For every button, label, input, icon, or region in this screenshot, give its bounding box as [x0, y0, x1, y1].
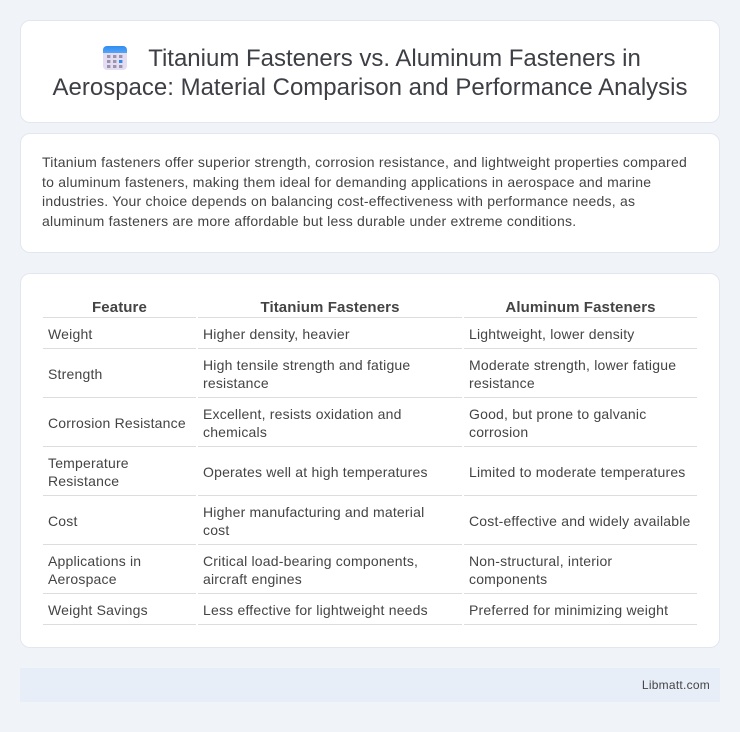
comparison table grid: Operates well at high temperatures	[203, 464, 428, 480]
title line 2: Aerospace: Material Comparison and Performance Analysis	[53, 74, 687, 101]
comparison table grid: Weight	[48, 326, 93, 342]
intro text: to aluminum fasteners, making them ideal for demanding applications in aerospace and marine	[42, 174, 651, 190]
intro text: Titanium fasteners offer superior strength, corrosion resistance, and lightweight properties compared	[42, 154, 687, 170]
comparison table grid: Less effective for lightweight needs	[203, 602, 428, 618]
comparison table grid: Non-structural, interior	[469, 553, 612, 569]
comparison table grid: Higher manufacturing and material	[203, 504, 424, 520]
comparison table grid: cost	[203, 522, 229, 538]
comparison table grid: Applications in	[48, 553, 141, 569]
comparison table grid: Temperature	[48, 455, 129, 471]
comparison table grid: Feature	[92, 299, 147, 316]
comparison table grid: resistance	[203, 375, 269, 391]
comparison table grid: Moderate strength, lower fatigue	[469, 357, 676, 373]
comparison table grid: Limited to moderate temperatures	[469, 464, 686, 480]
title line 1: Titanium Fasteners vs. Aluminum Fasteners in	[148, 45, 641, 72]
comparison table grid: Cost-effective and widely available	[469, 513, 691, 529]
comparison table grid: Titanium Fasteners	[260, 299, 400, 316]
comparison table grid: aircraft engines	[203, 571, 302, 587]
comparison table grid	[43, 299, 697, 625]
comparison table grid: Aluminum Fasteners	[505, 299, 656, 316]
comparison table grid: Lightweight, lower density	[469, 326, 635, 342]
comparison table grid: Good, but prone to galvanic	[469, 406, 646, 422]
footer text: Libmatt.com	[642, 678, 710, 692]
comparison table grid: Weight Savings	[48, 602, 148, 618]
intro text: industries. Your choice depends on balancing cost-effectiveness with performance needs, as	[42, 193, 635, 209]
comparison table grid: Critical load-bearing components,	[203, 553, 418, 569]
comparison table grid: Preferred for minimizing weight	[469, 602, 668, 618]
comparison table grid: Resistance	[48, 473, 119, 489]
intro text: aluminum fasteners are more affordable but less durable under extreme conditions.	[42, 213, 576, 229]
comparison table grid: Excellent, resists oxidation and	[203, 406, 402, 422]
intro text	[42, 154, 687, 229]
comparison table grid: Higher density, heavier	[203, 326, 350, 342]
comparison table grid: resistance	[469, 375, 535, 391]
comparison table grid: Aerospace	[48, 571, 117, 587]
comparison table grid: Strength	[48, 366, 103, 382]
comparison table grid: Cost	[48, 513, 78, 529]
panel: title header	[20, 20, 720, 123]
footer bar	[20, 668, 720, 702]
icon: calendar	[103, 46, 127, 70]
panel: introduction	[20, 133, 720, 253]
panel: comparison table	[20, 273, 720, 648]
comparison table grid: Corrosion Resistance	[48, 415, 186, 431]
comparison table grid: components	[469, 571, 547, 587]
comparison table grid: corrosion	[469, 424, 528, 440]
comparison table grid: chemicals	[203, 424, 267, 440]
comparison table grid: High tensile strength and fatigue	[203, 357, 410, 373]
